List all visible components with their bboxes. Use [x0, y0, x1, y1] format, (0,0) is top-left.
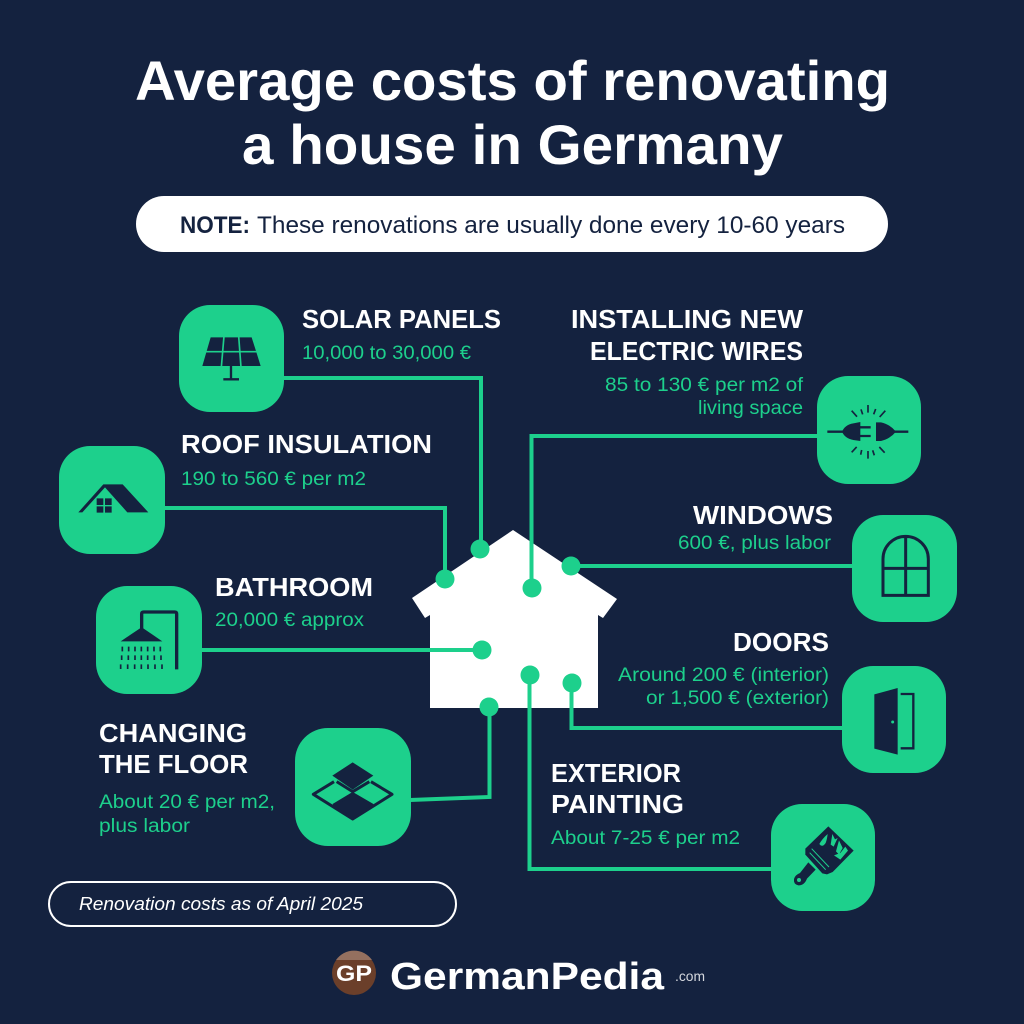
- text: installing new electric wires: INSTALLING NEW: [571, 306, 804, 334]
- text: solar panels: SOLAR PANELS: [302, 306, 501, 334]
- title: a house in Germany: [242, 113, 783, 176]
- note banner: NOTE:: [180, 212, 250, 239]
- text: doors: or 1,500 € (exterior): [646, 688, 829, 709]
- panel: installing new electric wires: [571, 306, 921, 484]
- text: exterior painting: About 7-25 € per m2: [551, 828, 740, 849]
- text: bathroom: BATHROOM: [215, 574, 373, 602]
- icon: window: [852, 515, 957, 622]
- logo: GermanPedia: GermanPedia: [390, 956, 665, 998]
- panel: exterior painting: [551, 760, 875, 911]
- icon: solar panel: [179, 305, 284, 412]
- text: installing new electric wires: ELECTRIC WIRES: [590, 338, 803, 366]
- title: [135, 49, 890, 176]
- icon: paint brush: [771, 804, 875, 911]
- panel: bathroom: [96, 574, 373, 694]
- text: bathroom: 20,000 € approx: [215, 610, 365, 631]
- text: changing the floor: THE FLOOR: [99, 751, 248, 779]
- text: windows: [678, 502, 833, 554]
- icon: shower: [96, 586, 202, 694]
- icon: GP badge: [332, 951, 376, 995]
- text: changing the floor: plus labor: [99, 816, 191, 837]
- text: solar panels: 10,000 to 30,000 €: [302, 343, 471, 364]
- text: roof insulation: 190 to 560 € per m2: [181, 469, 366, 490]
- panel: changing the floor: [99, 720, 411, 846]
- text: changing the floor: About 20 € per m2,: [99, 792, 275, 813]
- text: roof insulation: ROOF INSULATION: [181, 431, 432, 459]
- text: bathroom: [215, 574, 373, 631]
- connector lines: [164, 378, 853, 869]
- text: changing the floor: CHANGING: [99, 720, 247, 748]
- title: Average costs of renovating: [135, 49, 890, 112]
- text: windows: WINDOWS: [693, 502, 833, 530]
- connector dots: [436, 540, 582, 716]
- text: solar panels: [302, 306, 501, 364]
- icon: door: [842, 666, 946, 773]
- text: changing the floor: [99, 720, 275, 837]
- text: doors: Around 200 € (interior): [618, 665, 829, 686]
- text: installing new electric wires: living space: [698, 398, 803, 419]
- text: installing new electric wires: 85 to 130 € per m2 of: [605, 375, 804, 396]
- icon: plug and socket: [817, 376, 921, 484]
- footnote pill: [49, 882, 456, 926]
- panel: solar panels: [179, 305, 501, 412]
- text: windows: 600 €, plus labor: [678, 533, 832, 554]
- panel: roof insulation: [59, 431, 432, 554]
- note banner: [136, 196, 888, 252]
- text: exterior painting: [551, 760, 740, 849]
- icon: GP badge: GP: [336, 961, 372, 986]
- logo: GermanPedia: .com: [675, 968, 705, 984]
- panel: doors: [618, 629, 946, 773]
- house illustration: [412, 530, 617, 708]
- text: exterior painting: EXTERIOR: [551, 760, 681, 788]
- icon: roof: [59, 446, 165, 554]
- logo: GermanPedia: [332, 951, 705, 998]
- text: doors: [618, 629, 829, 709]
- footnote pill: Renovation costs as of April 2025: [79, 894, 364, 914]
- text: exterior painting: PAINTING: [551, 791, 684, 819]
- icon: floor tiles: [295, 728, 411, 846]
- text: doors: DOORS: [733, 629, 829, 657]
- note banner: These renovations are usually done every 10-60 years: [257, 212, 845, 239]
- panel: windows: [678, 502, 957, 622]
- text: roof insulation: [181, 431, 432, 490]
- text: installing new electric wires: [571, 306, 804, 419]
